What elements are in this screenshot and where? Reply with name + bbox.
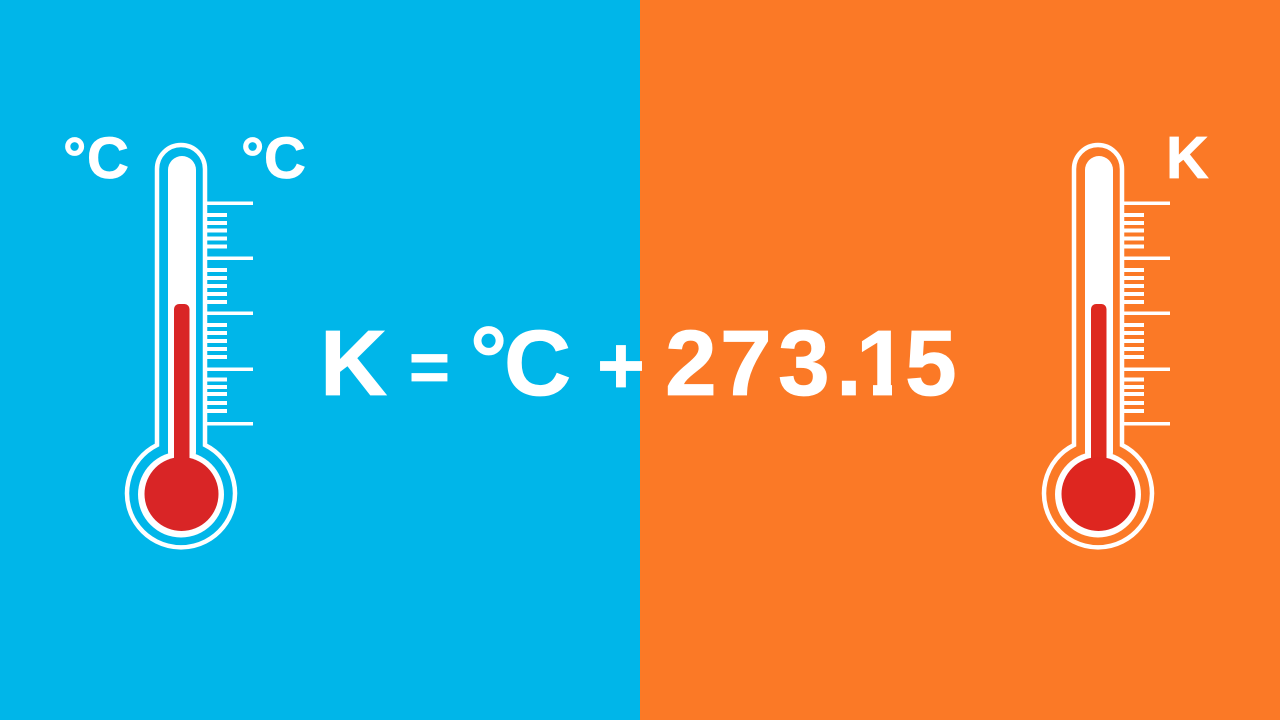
formula: K = °C + 273.15: ° (470, 307, 507, 411)
formula: K = °C + 273.15: + (597, 320, 645, 412)
formula: K = °C + 273.15: = (409, 328, 450, 406)
label: left celsius unit: °C (63, 126, 129, 191)
formula: K = °C + 273.15: 1 (856, 311, 908, 415)
panel: kelvin background (640, 0, 1280, 720)
formula: K = °C + 273.15 (320, 307, 957, 415)
icon: kelvin thermometer (1044, 145, 1170, 547)
formula: K = °C + 273.15: K (320, 311, 387, 415)
panel: celsius background (0, 0, 640, 720)
formula: K = °C + 273.15: 5 (905, 311, 957, 415)
label: kelvin unit: K (1166, 125, 1209, 191)
formula: K = °C + 273.15: . (836, 311, 862, 415)
formula: K = °C + 273.15: C (504, 311, 571, 415)
icon: celsius thermometer (127, 145, 253, 547)
formula: K = °C + 273.15: 3 (778, 311, 830, 415)
formula: K = °C + 273.15: 7 (720, 311, 772, 415)
label: right celsius unit: °C (241, 126, 306, 191)
formula: K = °C + 273.15: 2 (665, 311, 717, 415)
